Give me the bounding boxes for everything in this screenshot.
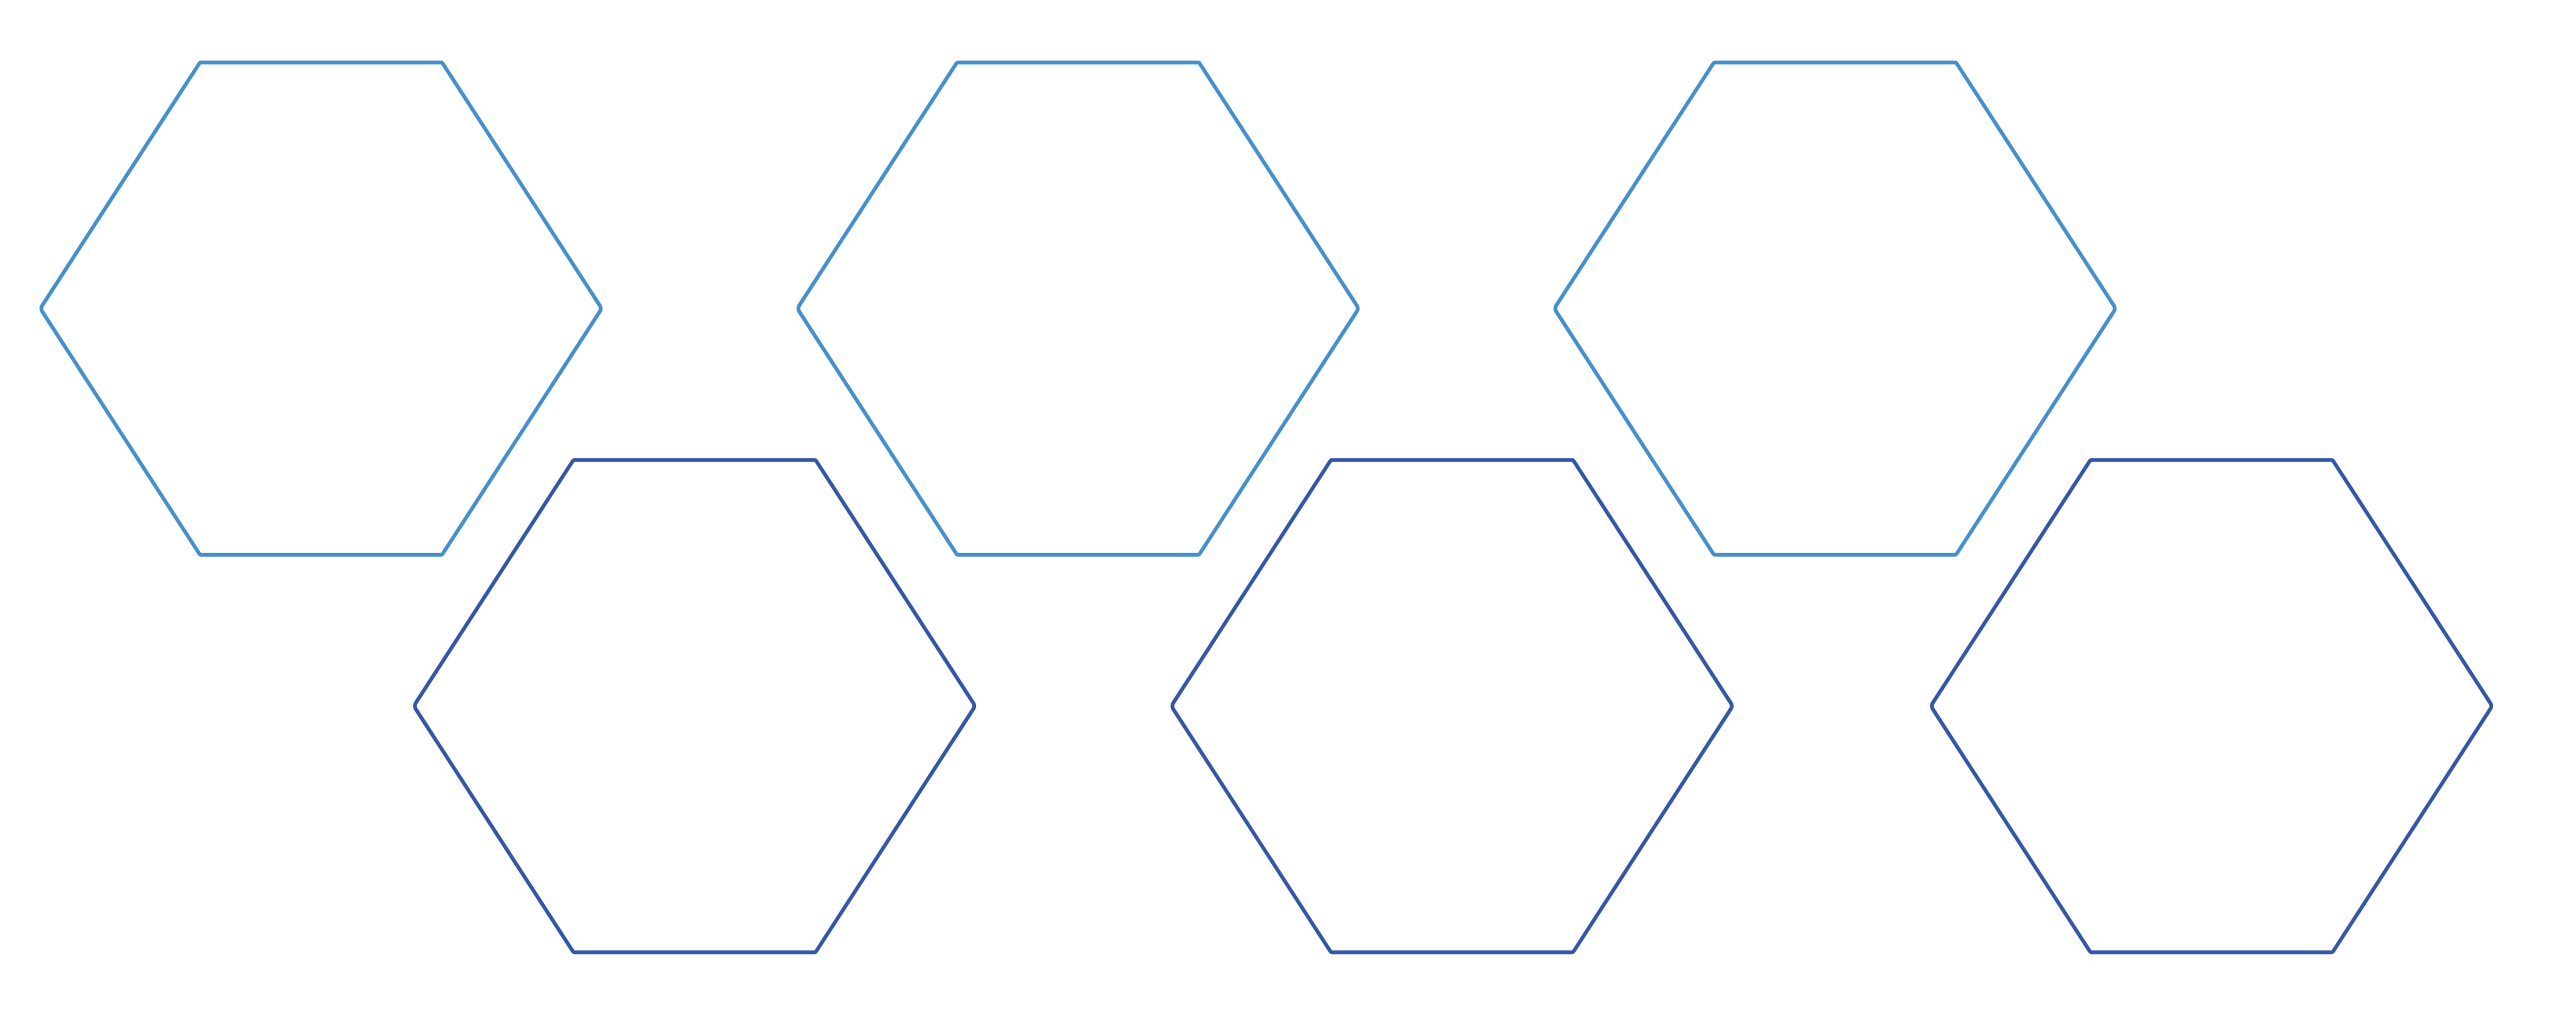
hexagon: bottom row 1 (415, 460, 974, 952)
hexagon: top row 2 (798, 62, 1358, 555)
hexagon: bottom row 2 (1172, 460, 1732, 952)
hexagon: top row 1 (41, 62, 601, 555)
hexagon: bottom row 3 (1932, 460, 2491, 952)
hexagon: top row 3 (1555, 62, 2115, 555)
